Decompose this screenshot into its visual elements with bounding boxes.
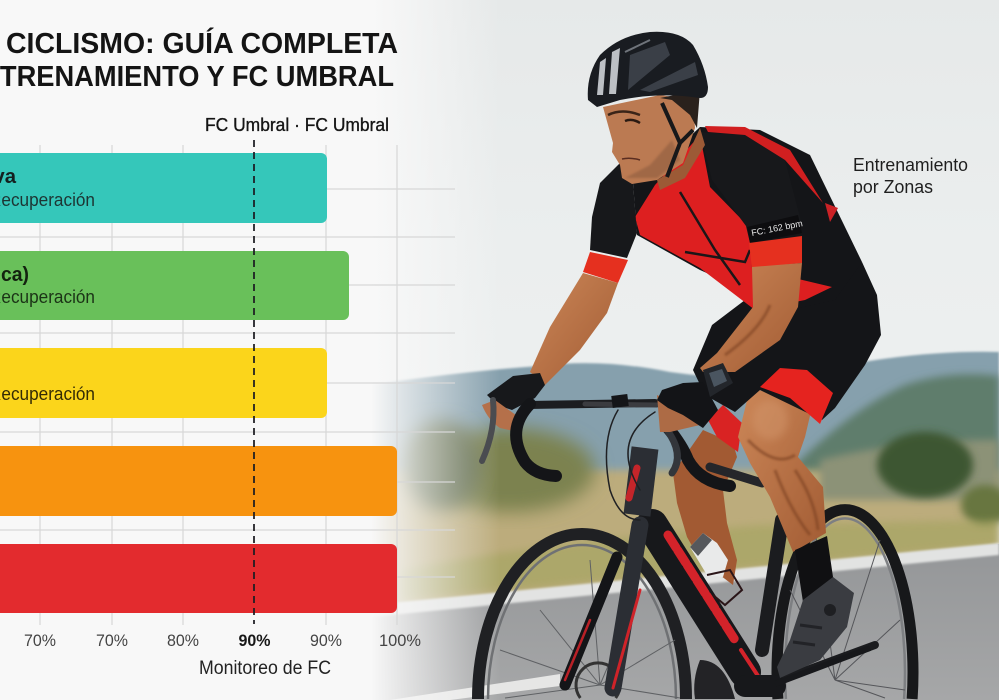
left glove (487, 373, 545, 410)
left sleeve (590, 163, 637, 258)
arm band with heart rate (747, 215, 803, 243)
left arm (530, 273, 618, 385)
rear shorts cuff (708, 405, 742, 452)
threshold label: FC Umbral · FC Umbral (205, 114, 389, 135)
left sleeve cuff (583, 252, 628, 283)
jersey torso (633, 127, 862, 310)
neck (657, 128, 705, 190)
right glove (657, 382, 718, 428)
right arm (700, 263, 802, 372)
threshold marker line (253, 140, 255, 624)
head and face (603, 95, 695, 184)
x axis labels: 90% (238, 631, 270, 650)
x axis labels: 90% (310, 631, 342, 650)
hair (660, 90, 700, 128)
helmet straps (662, 103, 693, 177)
side caption: Entrenamiento (853, 155, 968, 175)
shorts red band (760, 368, 833, 424)
handlebar (482, 400, 730, 486)
x axis labels: 70% (96, 631, 128, 650)
x axis labels (24, 631, 421, 650)
front wheel (478, 534, 686, 699)
x axis labels: 80% (167, 631, 199, 650)
sock (795, 536, 842, 602)
x axis labels: 70% (24, 631, 56, 650)
side caption: por Zonas (853, 177, 933, 197)
x axis labels: 100% (379, 631, 421, 650)
smartwatch (703, 363, 733, 397)
cycling shoe (777, 577, 854, 678)
chart grid (0, 145, 455, 625)
bike frame (565, 410, 875, 688)
right sleeve cuff (749, 236, 802, 268)
water bottle (690, 533, 742, 605)
x axis title: Monitoreo de FC (199, 658, 331, 679)
bar: green zone (0, 251, 349, 320)
title (0, 26, 398, 93)
title: CICLISMO: GUÍA COMPLETA (6, 26, 398, 60)
cyclist illustration (478, 32, 913, 699)
bar: yellow zone (0, 348, 327, 418)
helmet (588, 32, 708, 107)
shorts (693, 262, 881, 420)
jersey red shoulder stripe (705, 126, 823, 203)
bar: orange zone (0, 446, 397, 516)
bar: red zone (0, 544, 397, 613)
right sleeve (700, 132, 802, 243)
rear leg (673, 430, 737, 585)
right fingers (657, 395, 700, 432)
rear wheel (777, 510, 913, 699)
chainring (694, 660, 735, 699)
photo background: sky, hills, meadow and road (200, 0, 999, 700)
arm band with heart rate: FC: 162 bpm (750, 218, 803, 238)
left fingers (482, 400, 520, 432)
bar: teal zone (0, 153, 327, 223)
side caption (853, 155, 968, 197)
front leg (738, 388, 826, 552)
crank and pedal (775, 648, 870, 684)
